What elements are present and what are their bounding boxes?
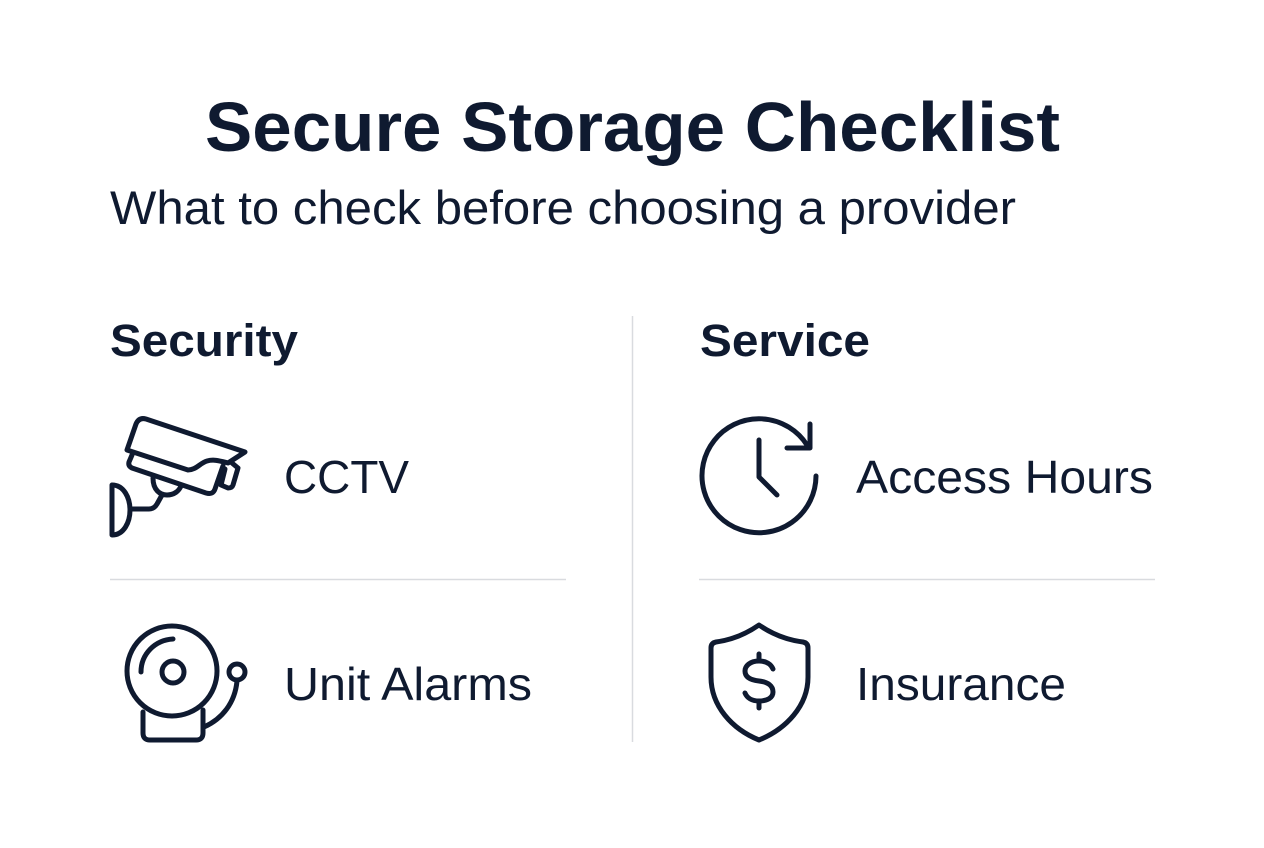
panel: service (700, 315, 1153, 740)
icon: insurance shield (711, 625, 808, 740)
label: unit alarms: Unit Alarms (284, 658, 532, 710)
title: Secure Storage Checklist (205, 88, 1060, 166)
subtitle: What to check before choosing a provider (110, 181, 1016, 234)
heading: security: Security (110, 315, 298, 366)
icon: clock with arrow (702, 419, 816, 533)
icon: cctv camera (112, 419, 245, 535)
label: insurance: Insurance (856, 658, 1066, 710)
label: cctv: CCTV (284, 451, 409, 503)
heading: service: Service (700, 315, 870, 366)
panel: security (110, 315, 532, 740)
label: access hours: Access Hours (856, 451, 1153, 503)
icon: alarm bell (127, 626, 245, 740)
